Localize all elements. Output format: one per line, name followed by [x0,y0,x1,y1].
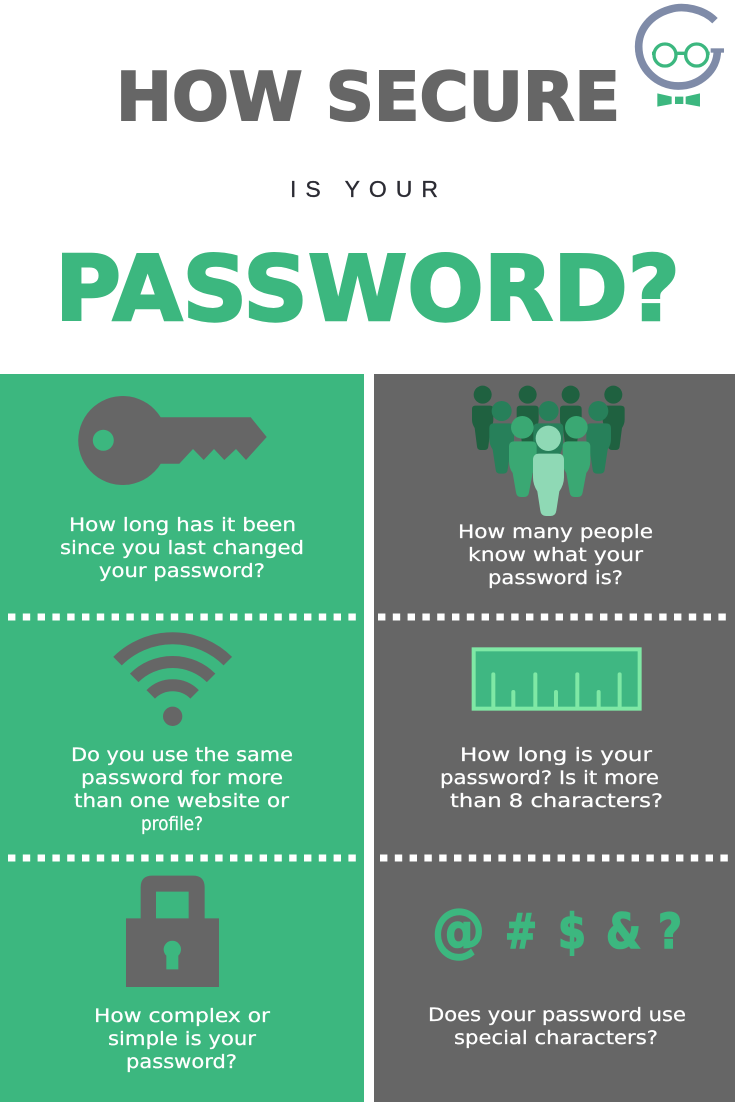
text: length: How long is your [460,744,652,766]
text: special characters: Does your password use [428,1004,686,1026]
text: complexity: How complex or [94,1005,270,1027]
text: length: than 8 characters? [450,790,663,812]
panel: complexity [94,876,270,1073]
text: people: know what your [468,544,643,566]
panel: people [458,386,653,589]
text: complexity [94,1005,270,1073]
icon: special symbols: @ [432,896,485,964]
text: special characters [428,1004,686,1049]
panel: reuse [71,638,293,835]
panel: special characters [428,896,686,1049]
icon: special symbols: # [505,904,537,960]
icon: wifi [117,638,228,726]
title [55,58,680,342]
text: last changed: How long has it been [69,514,296,536]
text: reuse: Do you use the same [71,744,293,766]
text: people: password is? [488,567,623,589]
panel: length [440,649,663,812]
title: PASSWORD? [55,237,680,342]
panel: left column [0,374,364,1102]
panel: last changed [60,396,304,582]
title: HOW SECURE [116,58,620,136]
text: length: password? Is it more [440,767,659,789]
icon: group of people [472,386,625,516]
text: last changed: since you last changed [60,537,304,559]
text: last changed [60,514,304,582]
text: reuse: than one website or [74,790,289,812]
icon: padlock [126,876,219,987]
icon: key [78,396,267,485]
text: complexity: simple is your [108,1028,256,1050]
logo [639,8,724,107]
title: IS YOUR [290,176,438,202]
icon: special symbols [432,896,682,964]
text: complexity: password? [126,1051,237,1073]
text: reuse: profile? [141,813,203,835]
text: people [458,521,653,589]
text: length [440,744,663,812]
text: reuse: password for more [81,767,283,789]
text: people: How many people [458,521,653,543]
icon: special symbols: ? [658,904,682,960]
icon: special symbols: & [606,904,641,960]
icon: special symbols: $ [558,904,586,960]
text: last changed: your password? [99,560,265,582]
text: special characters: special characters? [454,1027,658,1049]
icon: ruler [474,649,640,709]
panel: right column [374,374,735,1102]
text: reuse [71,744,293,835]
